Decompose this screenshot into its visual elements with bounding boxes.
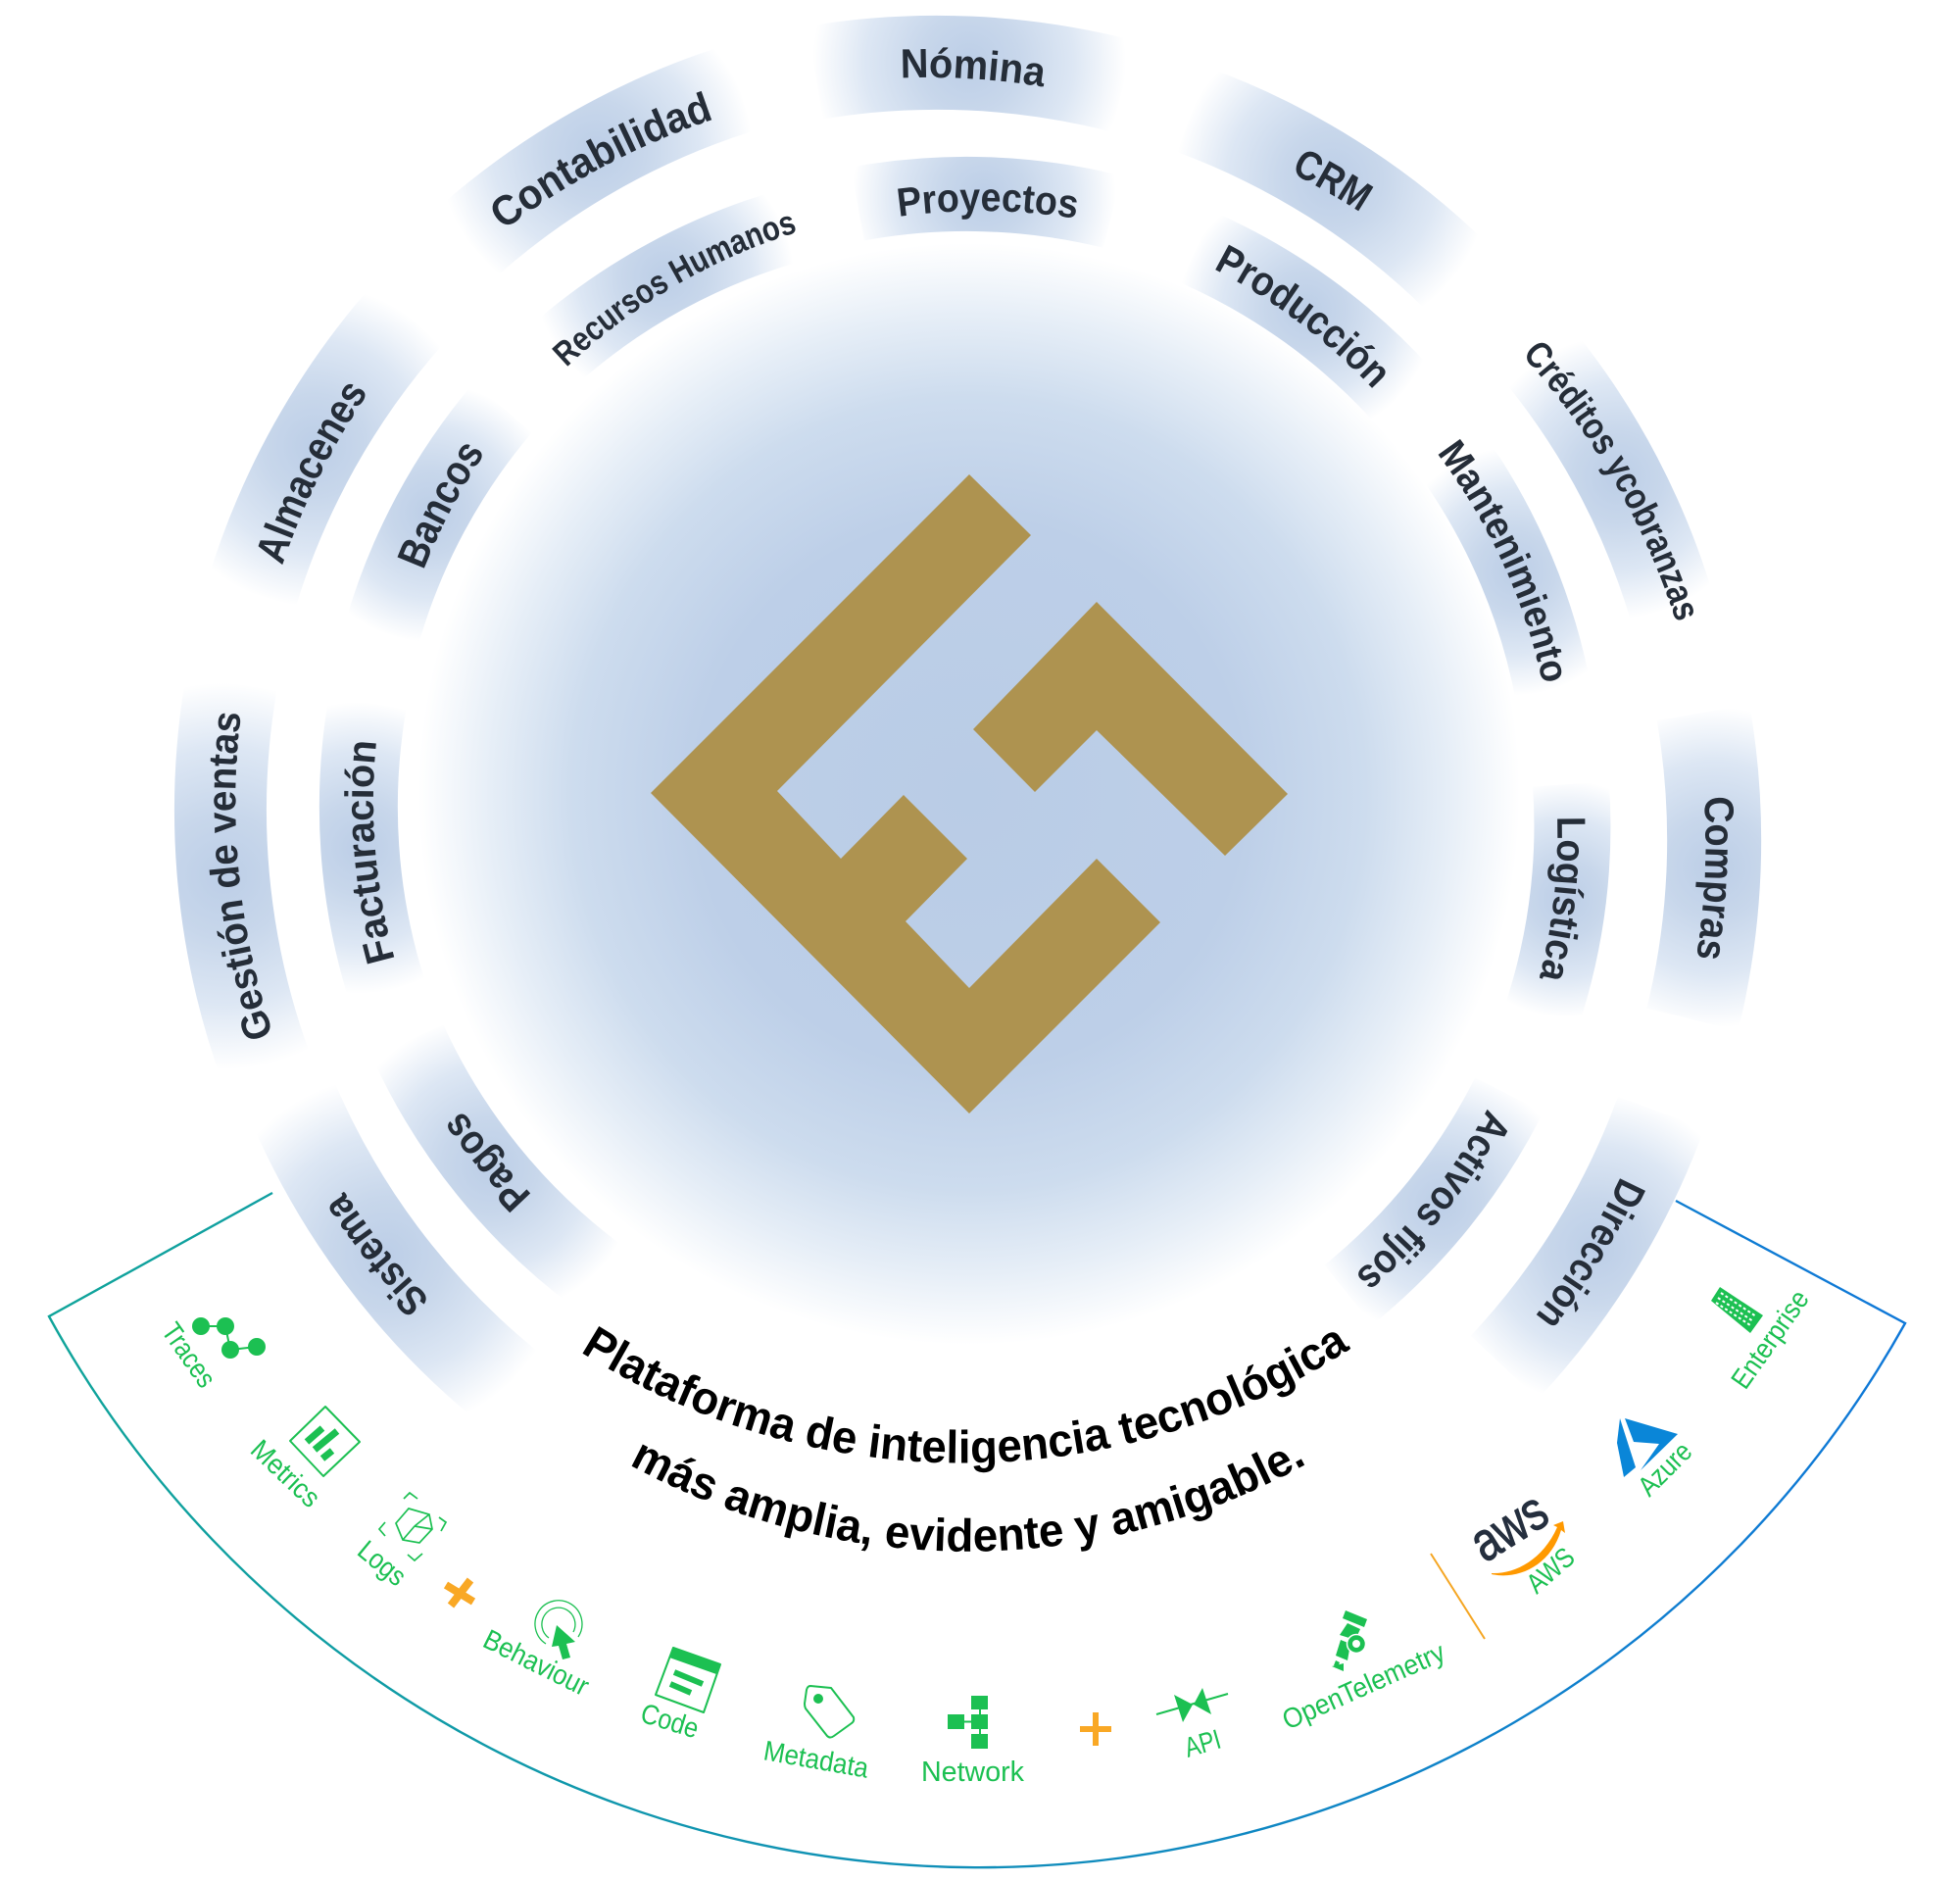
item: AWS: aws <box>1458 1479 1558 1573</box>
item: Logs <box>352 1493 446 1593</box>
module: Contabilidad: Contabilidad <box>492 90 711 225</box>
item: AWS <box>1458 1479 1581 1600</box>
module: Créditos y cobranzas: Créditos ycobranzas <box>1527 343 1693 619</box>
central glow disc <box>418 243 1520 1345</box>
module: CRM <box>1190 76 1468 298</box>
module: Nómina <box>825 16 1113 127</box>
module: Logística <box>1509 790 1611 1008</box>
module: Sistema <box>264 1098 525 1402</box>
plus sign: orange <box>1080 1712 1111 1746</box>
module: Mantenimiento: Mantenimiento <box>1439 439 1562 681</box>
module: Compras: Compras <box>1695 798 1735 959</box>
module: Contabilidad <box>458 53 739 265</box>
module: Dirección <box>1478 1108 1695 1384</box>
module: Pagos <box>383 1035 610 1290</box>
title: más amplia, evidente y amigable. <box>631 1445 1305 1553</box>
plus sign: orange <box>446 1580 473 1606</box>
module: Nómina: Nómina <box>903 47 1045 86</box>
item: Code <box>637 1648 720 1745</box>
module: Producción: Producción <box>1215 245 1386 388</box>
title: Plataforma de inteligencia tecnológica <box>582 1326 1350 1472</box>
item: API: API <box>1181 1724 1224 1764</box>
module: Dirección: Dirección <box>1537 1178 1645 1325</box>
divider: orange <box>1431 1554 1485 1639</box>
item: Behaviour <box>478 1601 594 1703</box>
module: Almacenes: Almacenes <box>259 384 365 565</box>
module: Bancos: Bancos <box>398 444 482 569</box>
item: Azure <box>1617 1418 1698 1503</box>
logo <box>651 474 1288 1114</box>
module: Pagos: Pagos <box>448 1114 531 1213</box>
item: Azure: Azure <box>1632 1436 1698 1503</box>
item: Metadata <box>761 1686 871 1785</box>
bottom frame <box>49 1193 1905 1867</box>
module: Gestión de ventas: Gestión de ventas <box>210 714 270 1039</box>
module: Recursos Humanos: Recursos Humanos <box>552 216 796 367</box>
module: CRM: CRM <box>1296 151 1374 212</box>
item: OpenTelemetry: OpenTelemetry <box>1278 1636 1450 1736</box>
item: Logs: Logs <box>352 1535 413 1593</box>
item: Metrics <box>244 1407 360 1514</box>
item: Enterprise: Enterprise <box>1726 1284 1816 1395</box>
module: Sistema: Sistema <box>329 1192 426 1315</box>
item: Metadata: Metadata <box>761 1735 871 1785</box>
item: Metrics: Metrics <box>244 1434 326 1514</box>
module: Gestión de ventas <box>174 699 303 1055</box>
item: Code: Code <box>637 1698 703 1745</box>
module: Almacenes <box>216 305 431 592</box>
item: Network: Network <box>921 1757 1025 1788</box>
module: Compras <box>1648 719 1762 1015</box>
module: Facturación: Facturación <box>344 742 394 965</box>
item: API <box>1156 1688 1228 1764</box>
item: Traces <box>155 1317 266 1394</box>
title <box>582 1326 1350 1553</box>
module: Activos fijos: Activos fijos <box>1358 1110 1507 1287</box>
item: Network <box>921 1696 1025 1788</box>
module: Proyectos <box>862 157 1105 245</box>
module: Bancos <box>352 398 525 631</box>
module: Proyectos: Proyectos <box>898 186 1077 220</box>
item: Behaviour: Behaviour <box>478 1624 594 1703</box>
item: Traces: Traces <box>155 1317 221 1394</box>
module: Facturación <box>319 714 420 982</box>
item: AWS: AWS <box>1521 1542 1581 1600</box>
module: Logística: Logística <box>1540 818 1586 979</box>
